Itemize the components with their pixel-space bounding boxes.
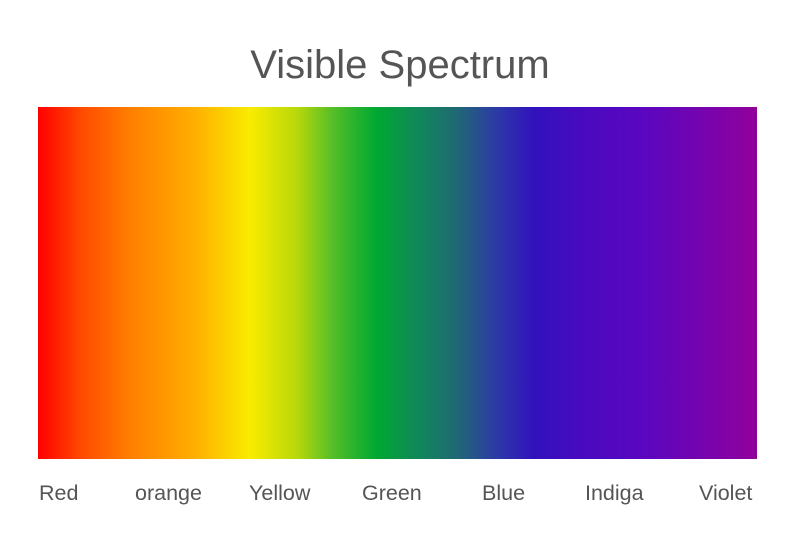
- title: Visible Spectrum: [250, 43, 550, 87]
- label: Yellow: Yellow: [249, 481, 310, 505]
- label: orange: orange: [135, 481, 202, 505]
- label: Blue: Blue: [482, 481, 525, 505]
- label: Red: Red: [39, 481, 78, 505]
- label: Indiga: Indiga: [585, 481, 644, 505]
- label: Green: Green: [362, 481, 422, 505]
- label: Violet: Violet: [699, 481, 752, 505]
- spectrum bar: [38, 107, 757, 459]
